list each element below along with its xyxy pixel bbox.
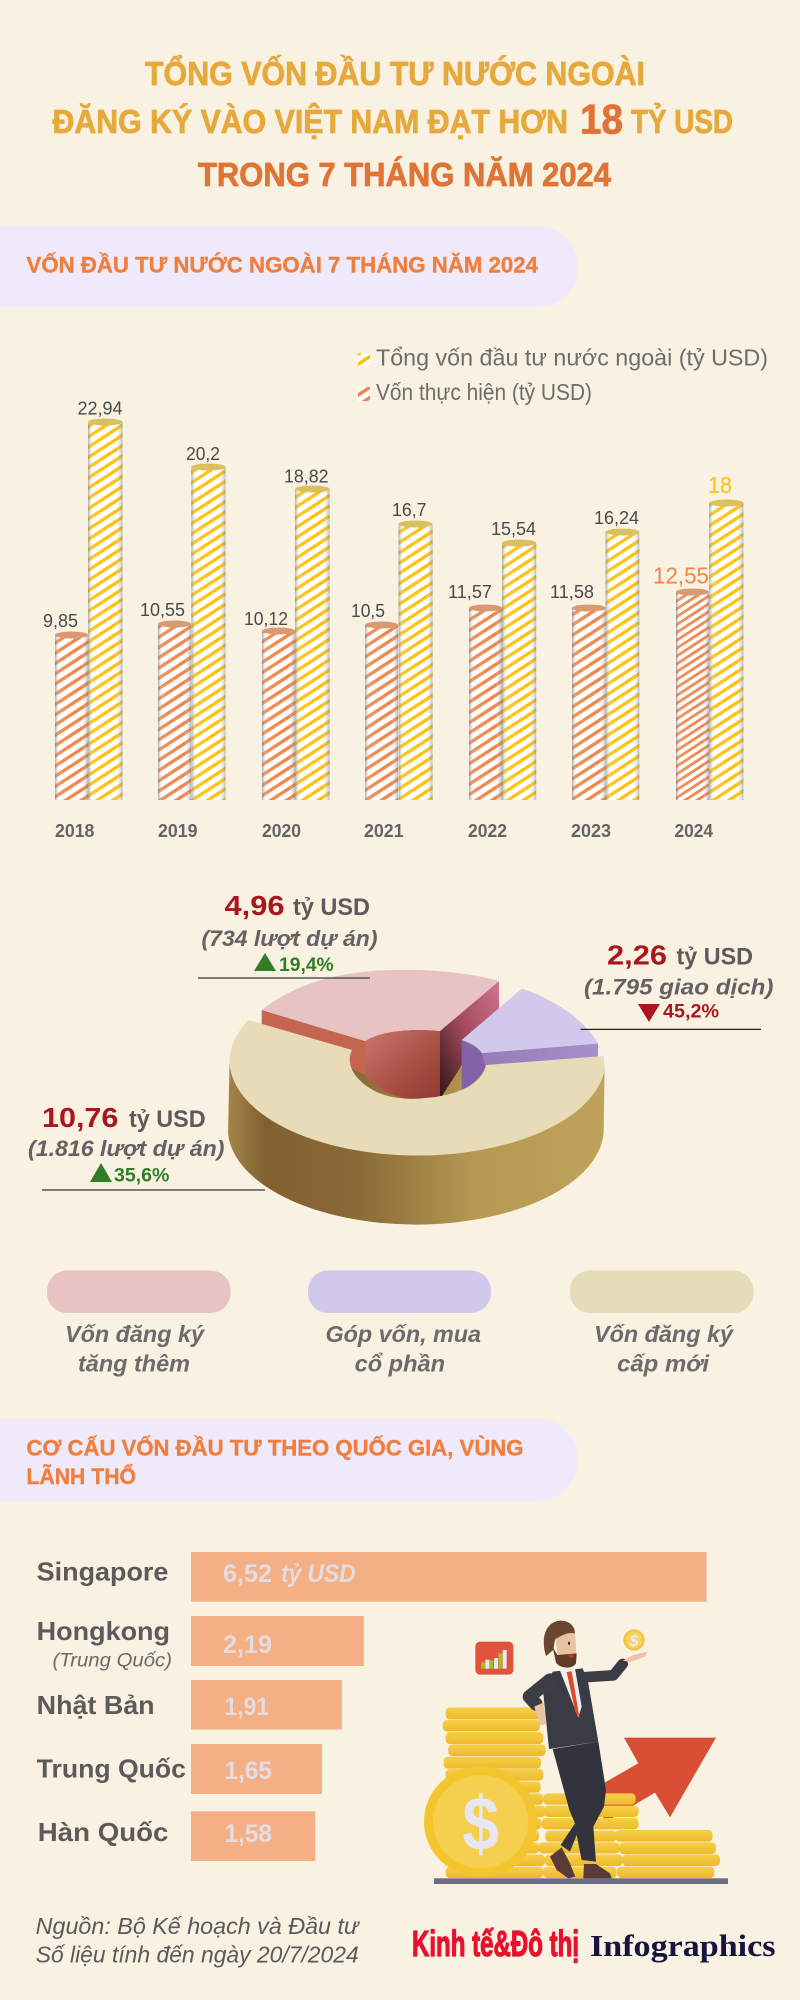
callout: 4,96 tỷ USD: 19,4% — [279, 955, 334, 976]
row: Hongkong: (Trung Quốc) — [52, 1651, 172, 1672]
title: TỔNG VỐN ĐẦU TƯ NƯỚC NGOÀI — [145, 54, 645, 92]
row: Nhật Bản — [37, 1680, 342, 1730]
row: Singapore: Singapore — [37, 1557, 168, 1587]
title: TRONG 7 THÁNG NĂM 2024 — [198, 156, 612, 193]
floor — [434, 1878, 728, 1884]
donut side wall — [228, 1063, 605, 1225]
year axis labels: 2022 — [468, 821, 507, 841]
source note: Số liệu tính đến ngày 20/7/2024 — [36, 1942, 359, 1968]
donut legend: vốn đăng ký tăng thêm — [47, 1270, 231, 1376]
value labels: 18 — [708, 472, 732, 498]
row: Hàn Quốc: Hàn Quốc — [38, 1817, 168, 1847]
row: Trung Quốc — [37, 1744, 322, 1794]
horizontal bar chart: countries — [37, 1552, 707, 1861]
year axis labels — [55, 821, 713, 841]
bar chart: FDI by year — [43, 399, 743, 841]
value labels: 20,2 — [186, 444, 220, 464]
callout: 4,96 tỷ USD — [198, 890, 378, 978]
value labels: 22,94 — [78, 399, 122, 419]
donut legend: vốn đăng ký cấp mới: cấp mới — [617, 1350, 710, 1376]
segment: vốn đăng ký tăng thêm — [262, 970, 499, 1100]
value labels: 16,7 — [392, 500, 426, 520]
title: 18 — [580, 96, 623, 142]
value labels: 16,24 — [594, 508, 639, 528]
year axis labels: 2023 — [571, 821, 611, 841]
title: ĐĂNG KÝ VÀO VIỆT NAM ĐẠT HƠN — [52, 103, 568, 140]
title: TỶ USD — [631, 103, 733, 140]
icon: big dollar coin: $ — [462, 1782, 499, 1867]
callout: 10,76 tỷ USD: 10,76 — [42, 1102, 118, 1133]
chart legend — [358, 344, 768, 405]
section heading: vốn đầu tư 7 tháng: VỐN ĐẦU TƯ NƯỚC NGOÀI 7 THÁNG NĂM 2024 — [26, 252, 539, 278]
value labels: 12,55 — [653, 562, 709, 588]
callout: 10,76 tỷ USD: tỷ USD — [129, 1106, 206, 1133]
value labels: 10,12 — [244, 609, 288, 629]
segment: vốn đăng ký cấp mới — [230, 1020, 605, 1156]
year axis labels: 2020 — [262, 821, 301, 841]
coin stacks — [443, 1707, 720, 1878]
row: Hàn Quốc: 1,58 — [224, 1820, 272, 1848]
callout: 2,26 tỷ USD: tỷ USD — [676, 943, 753, 970]
callout: 4,96 tỷ USD: (734 lượt dự án) — [202, 926, 378, 951]
donut legend: vốn đăng ký tăng thêm: Vốn đăng ký — [65, 1321, 205, 1347]
donut legend: vốn đăng ký cấp mới — [570, 1270, 754, 1376]
orange bars: vốn thực hiện — [55, 588, 709, 800]
row: Hongkong: Hongkong — [37, 1616, 170, 1646]
callout: 2,26 tỷ USD: (1.795 giao dịch) — [584, 974, 774, 999]
logo — [412, 1923, 776, 1964]
row: Trung Quốc: Trung Quốc — [37, 1754, 186, 1784]
row: Hongkong: 2,19 — [223, 1631, 272, 1659]
icon: chart badge — [475, 1642, 513, 1675]
callout: 10,76 tỷ USD — [28, 1102, 265, 1190]
source note: Nguồn: Bộ Kế hoạch và Đầu tư — [36, 1913, 360, 1939]
value labels: 10,55 — [140, 600, 185, 620]
donut legend: góp vốn, mua cổ phần — [308, 1270, 491, 1376]
value labels — [43, 399, 732, 631]
row: Trung Quốc: 1,65 — [224, 1757, 272, 1785]
icon: small coin: $ — [629, 1633, 640, 1650]
callout: 2,26 tỷ USD — [581, 939, 774, 1029]
callout: 10,76 tỷ USD: 35,6% — [114, 1165, 170, 1186]
value labels: 18,82 — [284, 466, 328, 486]
row: Nhật Bản: Nhật Bản — [37, 1690, 155, 1720]
chart legend: Tổng vốn đầu tư nước ngoài (tỷ USD) — [376, 344, 768, 370]
businessman — [529, 1621, 647, 1878]
illustration: businessman with coins and arrow — [424, 1621, 728, 1884]
year axis labels: 2019 — [158, 821, 198, 841]
chart legend: Vốn thực hiện (tỷ USD) — [376, 379, 592, 405]
year axis labels: 2021 — [364, 821, 404, 841]
row: Singapore — [37, 1552, 707, 1602]
icon: growth arrow — [603, 1738, 716, 1823]
callout: 2,26 tỷ USD: 45,2% — [663, 1002, 719, 1023]
section heading: cơ cấu vốn đầu tư: CƠ CẤU VỐN ĐẦU TƯ THEO QUỐC GIA, VÙNG — [26, 1434, 524, 1460]
row: Singapore: tỷ USD — [281, 1560, 356, 1588]
3D donut chart — [228, 970, 605, 1225]
year axis labels: 2024 — [674, 821, 713, 841]
logo: Kinh tế&Đô thị — [412, 1923, 579, 1964]
section heading: cơ cấu vốn đầu tư — [0, 1419, 578, 1501]
donut legend: vốn đăng ký tăng thêm: tăng thêm — [78, 1350, 190, 1376]
donut legend: góp vốn, mua cổ phần: Góp vốn, mua — [326, 1321, 481, 1347]
callout: 2,26 tỷ USD: 2,26 — [607, 939, 667, 970]
value labels: 11,57 — [448, 582, 492, 602]
row: Hàn Quốc — [38, 1811, 315, 1861]
callout: 4,96 tỷ USD: tỷ USD — [293, 894, 370, 921]
donut legend: góp vốn, mua cổ phần: cổ phần — [355, 1350, 445, 1376]
logo: Infographics — [590, 1928, 776, 1963]
icon: small coin — [623, 1629, 645, 1651]
title — [52, 54, 733, 193]
section heading: cơ cấu vốn đầu tư: LÃNH THỔ — [26, 1464, 136, 1489]
segment: góp vốn, mua cổ phần — [462, 988, 598, 1091]
value labels: 10,5 — [351, 601, 385, 621]
donut legend: vốn đăng ký cấp mới: Vốn đăng ký — [594, 1321, 734, 1347]
callout: 10,76 tỷ USD: (1.816 lượt dự án) — [28, 1136, 224, 1161]
value labels: 11,58 — [550, 582, 594, 602]
callout: 4,96 tỷ USD: 4,96 — [224, 890, 284, 921]
icon: big dollar coin — [424, 1766, 537, 1877]
value labels: 15,54 — [491, 519, 536, 539]
row: Hongkong — [37, 1616, 364, 1672]
row: Nhật Bản: 1,91 — [224, 1693, 269, 1721]
value labels: 9,85 — [43, 611, 78, 631]
row: Singapore: 6,52 — [223, 1560, 272, 1588]
year axis labels: 2018 — [55, 821, 94, 841]
section heading: vốn đầu tư 7 tháng — [0, 226, 578, 307]
yellow bars: tổng vốn đầu tư — [88, 418, 743, 800]
source note — [36, 1913, 360, 1968]
